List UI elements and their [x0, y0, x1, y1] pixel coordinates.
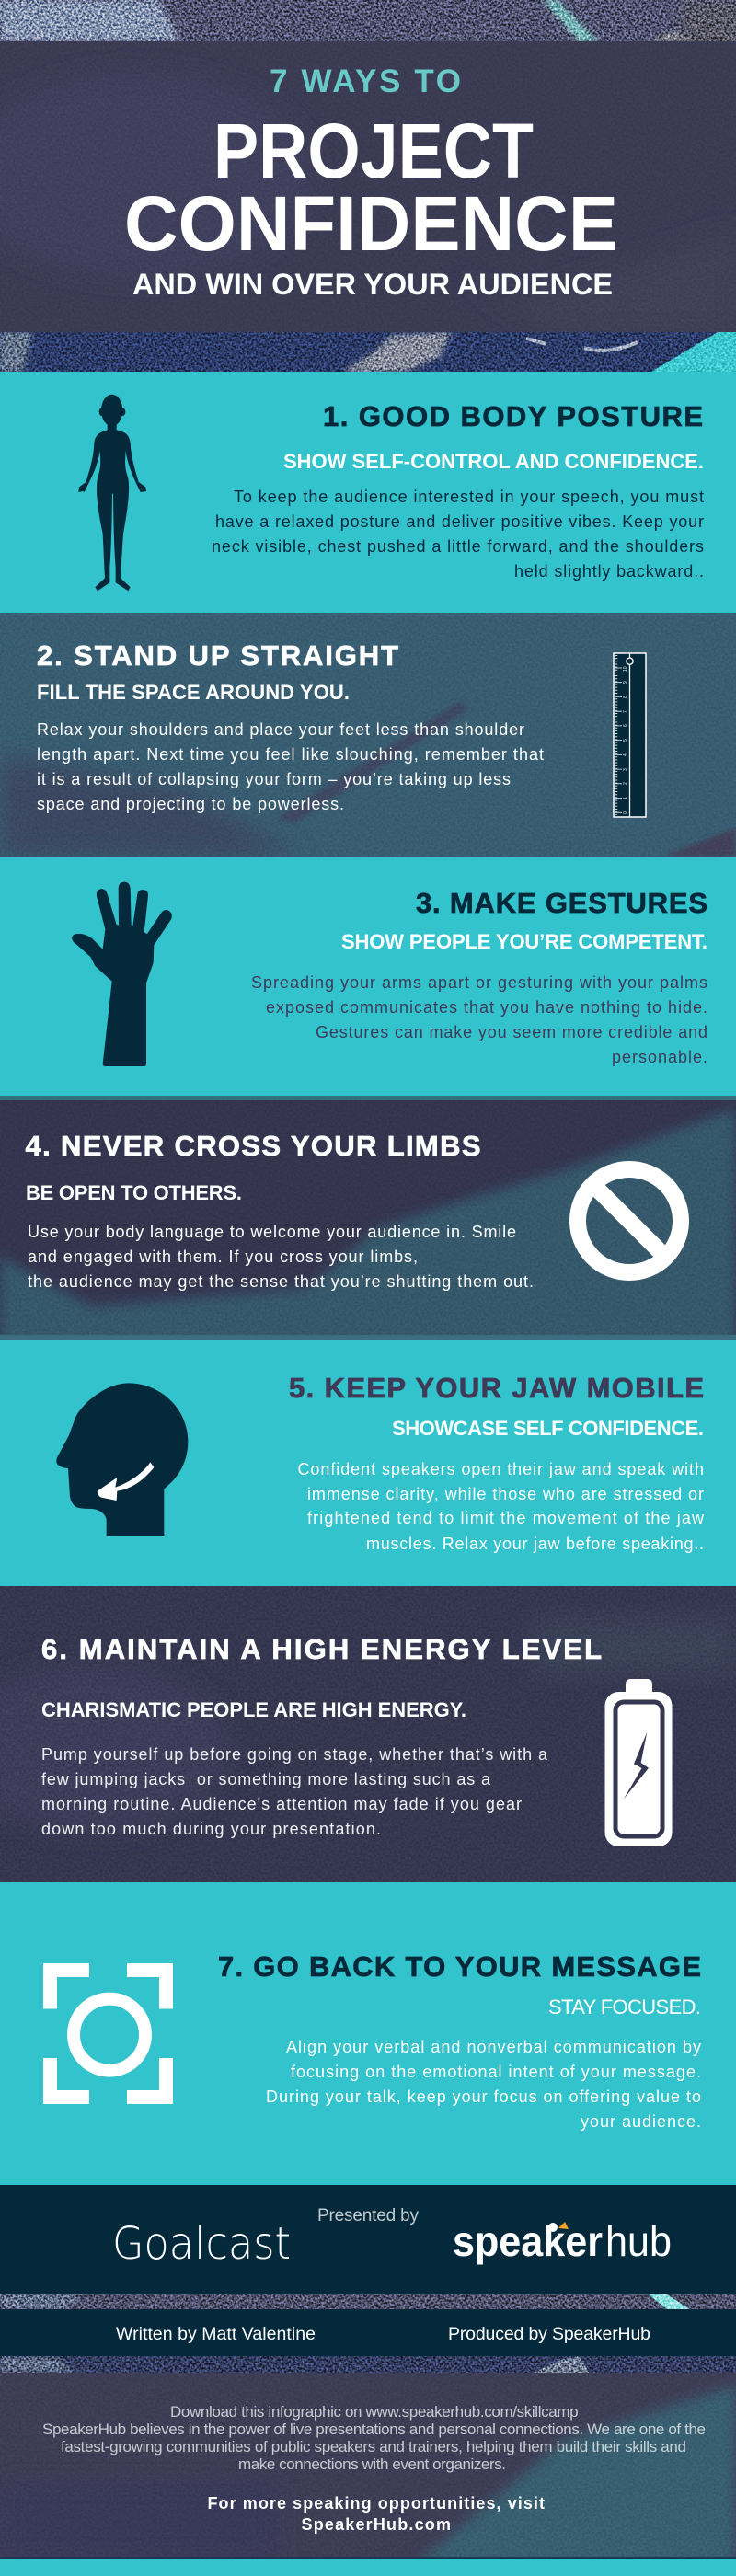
- icon: ruler: 10: [623, 666, 628, 672]
- icon: prohibition sign: [578, 1169, 681, 1272]
- icon: ruler: 2: [623, 782, 628, 785]
- body text: and engaged with them. If you cross your limbs,: [28, 1248, 418, 1266]
- body text: frightened tend to limit the movement of the jaw: [307, 1509, 705, 1527]
- body text: the audience may get the sense that you’re shutting them out.: [28, 1272, 534, 1291]
- textured strip: below title: [0, 332, 736, 372]
- panel: tip 4 never cross your limbs: [0, 1096, 736, 1352]
- heading: 4. NEVER CROSS YOUR LIMBS: [26, 1130, 480, 1162]
- subheading: CHARISMATIC PEOPLE ARE HIGH ENERGY.: [41, 1698, 466, 1721]
- subtitle: AND WIN OVER YOUR AUDIENCE: [132, 268, 613, 301]
- body text: it is a result of collapsing your form – you’re taking up less: [37, 770, 511, 788]
- body text: Confident speakers open their jaw and speak with: [298, 1460, 704, 1478]
- body text: muscles. Relax your jaw before speaking..: [366, 1535, 704, 1553]
- body text: held slightly backward..: [514, 562, 704, 581]
- body text: During your talk, keep your focus on offering value to: [266, 2087, 701, 2106]
- body text: focusing on the emotional intent of your message.: [291, 2063, 701, 2081]
- body text: [298, 1460, 705, 1553]
- textured strip: below presenters: [0, 2294, 736, 2309]
- body text: [266, 2038, 701, 2131]
- icon: ruler: 6: [623, 724, 628, 727]
- body text: few jumping jacks or something more lasting such as a: [41, 1770, 491, 1788]
- body text: Align your verbal and nonverbal communication by: [286, 2038, 701, 2056]
- about text: fastest-growing communities of public speakers and trainers, helping them build their skills and: [61, 2438, 686, 2455]
- icon: head with jaw arrow: [56, 1383, 188, 1536]
- body text: space and projecting to be powerless.: [37, 795, 344, 813]
- panel: tip 6 maintain a high energy level: [0, 1586, 736, 1882]
- icon: ruler: 8: [623, 696, 628, 698]
- subheading: FILL THE SPACE AROUND YOU.: [37, 681, 350, 704]
- about text: [42, 2403, 706, 2473]
- icon: ruler: 0: [623, 811, 628, 814]
- panel: tip 5 keep your jaw mobile: [0, 1340, 736, 1586]
- call to action: For more speaking opportunities, visit: [208, 2494, 545, 2513]
- textured background: [0, 1096, 736, 1340]
- body text: have a relaxed posture and deliver positive vibes. Keep your: [215, 512, 704, 531]
- logo: speakerhub: speaker: [453, 2217, 603, 2265]
- body text: Spreading your arms apart or gesturing with your palms: [251, 973, 707, 992]
- body text: [251, 973, 707, 1066]
- subheading: STAY FOCUSED.: [548, 1995, 701, 2018]
- icon: ruler: 4: [623, 753, 628, 756]
- heading: 3. MAKE GESTURES: [416, 887, 707, 919]
- body text: down too much during your presentation.: [41, 1820, 381, 1838]
- subheading: BE OPEN TO OTHERS.: [26, 1181, 242, 1204]
- about text: Download this infographic on www.speakerhub.com/skillcamp: [170, 2403, 579, 2421]
- title line: project: PROJECT: [213, 108, 534, 194]
- title line: confidence: CONFIDENCE: [124, 180, 618, 267]
- icon: ruler: 7: [623, 710, 628, 713]
- kicker: 7 ways to: 7 WAYS TO: [270, 63, 461, 99]
- body text: morning routine. Audience's attention may fade if you gear: [41, 1795, 522, 1813]
- textured strip: below credits: [0, 2356, 736, 2373]
- logo: goalcast: Goalcast: [112, 2218, 291, 2270]
- icon: ruler: 5: [623, 739, 628, 742]
- heading: 5. KEEP YOUR JAW MOBILE: [289, 1372, 704, 1404]
- credit: producer: Produced by SpeakerHub: [448, 2324, 650, 2344]
- body text: [37, 720, 544, 813]
- footer: about panel: [0, 2373, 736, 2567]
- body text: immense clarity, while those who are stressed or: [307, 1485, 704, 1503]
- textured background: [0, 2373, 736, 2559]
- body text: [41, 1745, 548, 1838]
- body text: neck visible, chest pushed a little forward, and the shoulders: [212, 537, 704, 556]
- footer: presenters band: [0, 2185, 736, 2294]
- credits bar: [0, 2309, 736, 2356]
- icon: focus frame with circle: [43, 1963, 173, 2104]
- icon: ruler: 1: [623, 797, 628, 799]
- textured background: [0, 613, 736, 857]
- subheading: SHOW SELF-CONTROL AND CONFIDENCE.: [283, 450, 704, 473]
- body text: Gestures can make you seem more credible and: [316, 1023, 707, 1041]
- credit: writer: Written by Matt Valentine: [116, 2324, 316, 2344]
- body text: [28, 1223, 534, 1291]
- body text: length apart. Next time you feel like slouching, remember that: [37, 745, 544, 764]
- body text: your audience.: [581, 2112, 701, 2131]
- body text: personable.: [612, 1048, 707, 1066]
- icon: ruler: 9: [623, 681, 628, 684]
- icon: raised hand: [72, 882, 172, 1066]
- body text: Pump yourself up before going on stage, whether that’s with a: [41, 1745, 548, 1764]
- heading: 7. GO BACK TO YOUR MESSAGE: [218, 1950, 701, 1983]
- heading: 1. GOOD BODY POSTURE: [323, 400, 703, 432]
- icon: human body silhouette: [78, 395, 146, 591]
- presented by label: Presented by: [317, 2206, 420, 2225]
- about text: make connections with event organizers.: [238, 2455, 506, 2473]
- icon: battery with bolt: [605, 1679, 672, 1846]
- panel: tip 2 stand up straight: [0, 613, 736, 857]
- icon: ruler: [614, 653, 646, 817]
- textured strip: top: [0, 0, 736, 41]
- panel: tip 7 go back to your message: [0, 1882, 736, 2185]
- about text: SpeakerHub believes in the power of live presentations and personal connections. We are one of the: [42, 2421, 706, 2438]
- subheading: SHOW PEOPLE YOU’RE COMPETENT.: [341, 930, 707, 953]
- title panel background: [0, 41, 736, 332]
- body text: exposed communicates that you have nothing to hide.: [266, 998, 707, 1017]
- call to action: SpeakerHub.com: [302, 2515, 451, 2534]
- header: textured photo strip and title panel: [0, 0, 736, 372]
- textured background: [0, 1586, 736, 1882]
- body text: Relax your shoulders and place your feet less than shoulder: [37, 720, 524, 739]
- heading: 6. MAINTAIN A HIGH ENERGY LEVEL: [41, 1633, 602, 1665]
- panel: tip 1 good body posture: [0, 372, 736, 613]
- heading: 2. STAND UP STRAIGHT: [37, 639, 398, 672]
- body text: Use your body language to welcome your audience in. Smile: [28, 1223, 516, 1241]
- subheading: SHOWCASE SELF CONFIDENCE.: [392, 1417, 704, 1440]
- call to action: [208, 2494, 545, 2534]
- icon: ruler: 3: [623, 768, 628, 771]
- body text: To keep the audience interested in your speech, you must: [234, 488, 704, 506]
- panel: tip 3 make gestures: [0, 857, 736, 1096]
- body text: [212, 488, 704, 581]
- logo: speakerhub: hub: [605, 2217, 672, 2265]
